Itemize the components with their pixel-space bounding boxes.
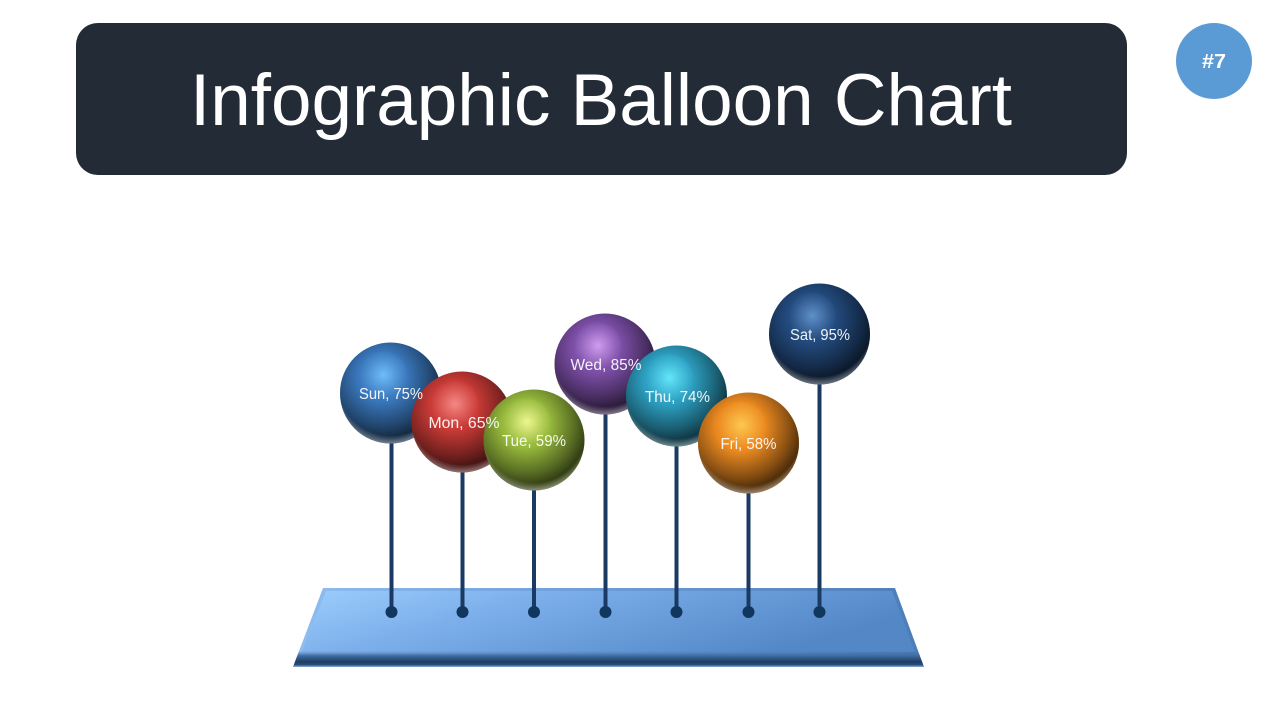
- balloon: Wed, 85%: [554, 314, 656, 618]
- balloon labels: Wed, 85%: [570, 357, 642, 374]
- balloon labels: Tue, 59%: [502, 433, 566, 450]
- title text: Infographic Balloon Chart: [190, 60, 1012, 141]
- badge: #7: [1176, 23, 1252, 99]
- balloon labels: Sat, 95%: [790, 327, 850, 344]
- balloon labels: [359, 327, 850, 453]
- balloon: Tue, 59%: [484, 390, 584, 618]
- balloon labels: Fri, 58%: [720, 436, 777, 453]
- balloon labels: Sun, 75%: [359, 386, 423, 403]
- balloon: Fri, 58%: [698, 392, 799, 618]
- platform base: [293, 588, 924, 667]
- balloon labels: Mon, 65%: [428, 415, 500, 432]
- balloon: Thu, 74%: [626, 346, 727, 618]
- balloon: Sun, 75%: [340, 342, 441, 618]
- balloon labels: Thu, 74%: [645, 389, 710, 406]
- title banner: [76, 23, 1127, 175]
- balloon: Sat, 95%: [769, 284, 870, 618]
- badge: #7: #7: [1202, 51, 1226, 73]
- balloon: Mon, 65%: [412, 372, 512, 618]
- chart: balloon chart: [293, 284, 924, 667]
